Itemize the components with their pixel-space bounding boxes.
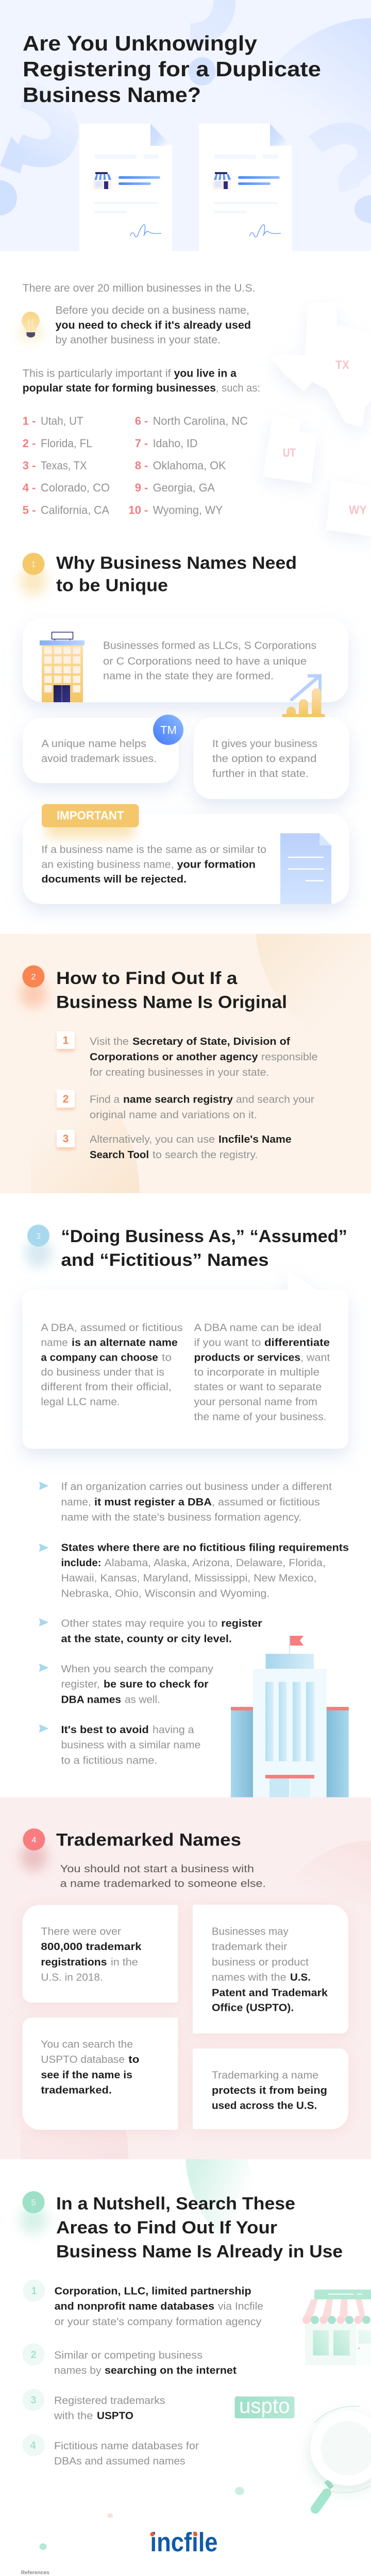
panel: intro (19, 282, 260, 516)
left column: a company can choose (41, 1352, 158, 1363)
list: top ten states: Colorado, CO (41, 481, 110, 494)
item 2 (23, 2343, 237, 2376)
card: trademark protection: protects it from being (212, 2084, 327, 2096)
panel: hero (0, 0, 371, 251)
card: trademark issues: A unique name helps (41, 738, 146, 750)
card: expand further: It gives your business (212, 738, 317, 750)
illustration: storefront (302, 2290, 371, 2365)
bullet: avoid similar names: business with a similar name (61, 1739, 200, 1751)
left column: is an alternate name (72, 1337, 178, 1348)
bullet: states with no requirements (40, 1541, 349, 1599)
list: top ten states: Idaho, ID (153, 437, 197, 450)
icon: office building (40, 632, 85, 702)
badge 5: 5 (31, 2199, 36, 2207)
bullet: other states (40, 1618, 262, 1645)
bullet: avoid similar names: It's best to avoid (61, 1724, 149, 1736)
Wyoming shape (326, 480, 371, 536)
bullet: must register: , assumed or fictitious (212, 1496, 320, 1508)
left column (41, 1322, 183, 1408)
text block: check the name: by another business in your state. (56, 334, 221, 346)
subheading: a name trademarked to someone else. (60, 1877, 266, 1889)
list: top ten states: Utah, UT (41, 414, 83, 428)
step 1: Visit the (90, 1036, 129, 1047)
illustration: government building (231, 1635, 349, 1797)
bullet: avoid similar names: to a fictitious name. (61, 1754, 157, 1766)
list: top ten states (23, 414, 248, 516)
card: 800,000 registrations: U.S. in 2018. (41, 1971, 103, 1983)
text block: check the name: you need to check if it's already used (56, 319, 251, 331)
Texas shape (269, 303, 371, 427)
subheading (60, 1863, 266, 1889)
panel: section 3 doing business as (23, 1225, 349, 1766)
right column: the name of your business. (194, 1412, 327, 1423)
item 2: 2 (30, 2349, 37, 2361)
bullet: other states: at the state, county or city level. (61, 1633, 232, 1645)
state labels: UT (283, 446, 296, 460)
bullet: avoid similar names: having a (153, 1724, 194, 1736)
step 2: 2 (63, 1093, 69, 1105)
step 1: 1 (63, 1035, 69, 1046)
subheading: You should not start a business with (60, 1863, 254, 1875)
card: 800,000 registrations: There were over (41, 1926, 121, 1938)
step 2: Find a (90, 1094, 120, 1106)
bullet: states with no requirements: include: (61, 1557, 101, 1569)
card: U.S. patent office: Office (USPTO). (212, 2002, 294, 2014)
bullet: avoid similar names (40, 1724, 200, 1766)
card: search USPTO database: USPTO database (41, 2054, 125, 2065)
step 3 (57, 1130, 292, 1161)
list: top ten states: 6 (135, 414, 141, 428)
bullet: must register: name, (61, 1496, 91, 1508)
bullet: states with no requirements: Hawaii, Kansas, Maryland, Mississippi, New Mexico, (61, 1572, 316, 1584)
warning text: If a business name is the same as or similar to (41, 844, 266, 856)
panel: section 1 why names need to be unique (20, 553, 349, 904)
step 1: responsible (261, 1051, 318, 1063)
text block: popular states: This is particularly important if (23, 368, 171, 379)
right column: if you want to (194, 1337, 261, 1348)
list: top ten states: - (144, 414, 148, 428)
card: trademark issues: avoid trademark issues. (41, 753, 157, 765)
card: search USPTO database: see if the name is (41, 2069, 132, 2081)
logo: incfile: incfile (150, 2528, 217, 2557)
bullet: states with no requirements: Alabama, Alaska, Arizona, Delaware, Florida, (104, 1557, 326, 1569)
item 4 (23, 2434, 199, 2467)
warning text: documents will be rejected. (41, 873, 187, 885)
heading: Trademarked Names (56, 1830, 241, 1850)
panel: section 2 how to find out (0, 934, 371, 1193)
badge 2: 2 (31, 973, 36, 981)
card: expand further: the option to expand (212, 753, 316, 765)
step 2: name search registry (123, 1094, 233, 1106)
heading: Why Business Names Need (56, 553, 297, 573)
heading (56, 969, 287, 1012)
speech card (23, 1270, 348, 1449)
card: search USPTO database: to (128, 2054, 139, 2065)
step 2: and search your (236, 1094, 314, 1106)
item 2: Similar or competing business (54, 2350, 203, 2361)
panel: state maps (263, 303, 371, 536)
item 3: with the (54, 2410, 93, 2421)
heading: to be Unique (56, 576, 168, 596)
list: top ten states: - (32, 504, 36, 516)
list: top ten states: - (32, 481, 36, 494)
card: formation types (23, 618, 348, 702)
item 1: and nonprofit name databases (55, 2301, 214, 2312)
list: top ten states: 9 (135, 481, 141, 494)
list: top ten states: 10 (128, 504, 141, 516)
right column: , want (300, 1352, 330, 1363)
list: top ten states: 8 (135, 459, 141, 472)
step 1: for creating businesses in your state. (90, 1066, 269, 1078)
step 3: Incfile's Name (218, 1133, 292, 1145)
warning text (41, 844, 266, 885)
title: Are You Unknowingly (23, 31, 257, 55)
list: top ten states: Texas, TX (41, 459, 87, 472)
badge 5 (19, 2191, 48, 2234)
heading: and “Fictitious” Names (61, 1250, 269, 1270)
state labels: TX (335, 358, 350, 371)
item 1: 1 (31, 2285, 37, 2297)
card: U.S. patent office: U.S. (290, 1971, 311, 1983)
item 3: Registered trademarks (54, 2395, 165, 2406)
state labels (283, 358, 367, 516)
heading (56, 2194, 343, 2261)
list: top ten states: Wyoming, WY (153, 504, 223, 516)
heading: How to Find Out If a (56, 969, 238, 988)
step 1: Secretary of State, Division of (132, 1036, 290, 1047)
right column: A DBA name can be ideal (194, 1322, 322, 1333)
heading: Areas to Find Out If Your (56, 2218, 277, 2238)
decorative question marks (0, 0, 371, 223)
text block: check the name (56, 304, 251, 346)
text block: check the name: Before you decide on a business name, (56, 304, 249, 316)
badge 1 (20, 553, 47, 596)
card: U.S. patent office: trademark their (212, 1941, 288, 1953)
decorative dots (40, 2487, 341, 2576)
icon: storefront copy (213, 172, 231, 189)
card: search USPTO database: You can search the (41, 2039, 133, 2050)
text block: popular states: you live in a (174, 368, 237, 379)
list: top ten states: - (32, 414, 36, 428)
left column: A DBA, assumed or fictitious (41, 1322, 183, 1333)
list: top ten states: - (144, 481, 148, 494)
list: top ten states: - (32, 459, 36, 472)
icon: magnifying glass (310, 2406, 371, 2509)
list: top ten states: - (32, 437, 36, 450)
step 2 (57, 1090, 314, 1121)
document illustration 1 (79, 124, 172, 251)
title (23, 31, 321, 107)
card: 800,000 registrations: 800,000 trademark (41, 1941, 142, 1953)
item 1: Corporation, LLC, limited partnership (55, 2285, 251, 2297)
card: trademark protection (193, 2048, 348, 2129)
item 1: via Incfile (218, 2301, 263, 2312)
right column: to incorporate in multiple (194, 1367, 319, 1378)
important label: IMPORTANT (57, 809, 124, 822)
badge 1: 1 (31, 561, 36, 569)
bullet: check DBA names: be sure to check for (104, 1679, 209, 1690)
icon: TM badge (153, 715, 183, 745)
list: top ten states: California, CA (41, 504, 109, 516)
bullet: states with no requirements: Nebraska, Ohio, Wisconsin and Wyoming. (61, 1588, 269, 1599)
step 3: 3 (63, 1133, 69, 1145)
icon: growth chart (282, 674, 325, 717)
item 4: Fictitious name databases for (54, 2441, 199, 2452)
bullet: check DBA names: DBA names (61, 1694, 121, 1705)
heading: “Doing Business As,” “Assumed” (61, 1227, 347, 1246)
references: References (21, 2570, 49, 2576)
text block: popular states: , such as: (216, 382, 260, 394)
intro line: There are over 20 million businesses in the U.S. (23, 282, 256, 294)
logo: uspto: uspto (239, 2394, 290, 2418)
list: top ten states: 7 (135, 437, 141, 450)
left column: name (41, 1337, 68, 1348)
badge 3: 3 (36, 1232, 41, 1241)
card: 800,000 registrations (23, 1905, 178, 2003)
icon: storefront (93, 172, 111, 189)
panel: section 4 trademarked names (0, 1797, 371, 2159)
list: top ten states: - (144, 504, 148, 516)
left column: to (162, 1352, 172, 1363)
card: trademark protection: Trademarking a name (212, 2070, 318, 2081)
left column: legal LLC name. (41, 1397, 120, 1408)
icon: light bulb (19, 312, 43, 342)
bullet: other states: register (221, 1618, 262, 1629)
badge 4: 4 (32, 1836, 37, 1844)
state labels: WY (349, 503, 367, 516)
badge 2 (20, 965, 47, 1008)
Utah shape (263, 414, 317, 483)
list: top ten states: 4 (23, 481, 29, 494)
list: top ten states: Florida, FL (41, 437, 92, 450)
badge 3 (25, 1225, 52, 1267)
item 1: or your state's company formation agency (55, 2316, 261, 2328)
item 3: 3 (30, 2395, 37, 2406)
heading: Business Name Is Already in Use (56, 2242, 343, 2261)
step 1: Corporations or another agency (90, 1051, 258, 1063)
card text: or C Corporations need to have a unique (103, 655, 307, 667)
list: top ten states: 2 (23, 437, 29, 450)
card text: name in the state they are formed. (103, 670, 274, 682)
bullet: must register (40, 1481, 332, 1523)
step 3: Search Tool (90, 1149, 149, 1161)
bullet: states with no requirements: States where there are no fictitious filing requirements (61, 1541, 349, 1553)
right column: differentiate (264, 1337, 330, 1348)
card: search USPTO database (23, 2018, 178, 2130)
card: U.S. patent office: Patent and Trademark (212, 1987, 328, 1998)
card: trademark issues (23, 718, 179, 783)
text block: popular states: popular state for forming businesses (23, 382, 216, 394)
document illustration 2 (199, 124, 292, 251)
list: top ten states: Georgia, GA (153, 481, 215, 494)
card: U.S. patent office: names with the (212, 1971, 286, 1983)
text block: popular states (23, 368, 260, 394)
card: search USPTO database: trademarked. (41, 2084, 112, 2096)
heading: Business Name Is Original (56, 993, 287, 1012)
card text (103, 640, 316, 682)
item 4: 4 (30, 2440, 36, 2451)
item 1 (23, 2279, 263, 2328)
left column: different from their official, (41, 1382, 172, 1393)
bullet: must register: name with the state's business formation agency. (61, 1512, 301, 1523)
card: 800,000 registrations: registrations (41, 1956, 107, 1968)
right column: products or services (194, 1352, 300, 1363)
heading (56, 553, 297, 596)
left column: do business under that is (41, 1367, 164, 1378)
icon: TM badge: TM (160, 724, 177, 737)
card: U.S. patent office: Businesses may (212, 1926, 289, 1938)
list: top ten states: Oklahoma, OK (153, 459, 226, 472)
bullet: must register: it must register a DBA (94, 1496, 212, 1508)
list: top ten states: 1 (23, 414, 29, 428)
card text: Businesses formed as LLCs, S Corporations (103, 640, 316, 652)
card: 800,000 registrations: in the (111, 1956, 138, 1968)
item 3: USPTO (97, 2410, 133, 2421)
bullet: other states: Other states may require you to (61, 1618, 217, 1629)
item 2: searching on the internet (105, 2365, 237, 2376)
right column (194, 1322, 330, 1423)
card: trademark protection: used across the U.S. (212, 2100, 317, 2112)
heading: In a Nutshell, Search These (56, 2194, 295, 2213)
right column: states or want to separate (194, 1382, 322, 1393)
bullet: check DBA names: as well. (125, 1694, 160, 1705)
card: expand further (194, 717, 349, 799)
badge 4 (21, 1828, 47, 1871)
step 1 (57, 1031, 318, 1078)
heading (61, 1227, 347, 1270)
title: Business Name? (23, 83, 201, 107)
list: top ten states: 3 (23, 459, 29, 472)
list: top ten states: - (144, 459, 148, 472)
list: top ten states: North Carolina, NC (153, 414, 248, 428)
warning text: your formation (177, 859, 256, 871)
step 3: to search the registry. (153, 1149, 258, 1161)
card: U.S. patent office (193, 1905, 348, 2033)
item 4: DBAs and assumed names (54, 2456, 185, 2467)
bullet: check DBA names (40, 1663, 214, 1705)
item 2: names by (54, 2365, 101, 2376)
right column: your personal name from (194, 1397, 317, 1408)
list: top ten states: - (144, 437, 148, 450)
step 3: Alternatively, you can use (90, 1133, 215, 1145)
card: expand further: further in that state. (212, 768, 309, 779)
card: important (23, 804, 349, 904)
title: Registering for a Duplicate (23, 57, 321, 81)
step 2: original name and variations on it. (90, 1109, 257, 1121)
list: top ten states: 5 (23, 504, 29, 516)
item 3 (23, 2388, 165, 2421)
bullet: must register: If an organization carries out business under a different (61, 1481, 332, 1493)
bullet: check DBA names: register, (61, 1679, 100, 1690)
bullet: check DBA names: When you search the company (61, 1663, 214, 1675)
warning text: an existing business name, (41, 859, 174, 871)
important label (42, 804, 139, 838)
card: U.S. patent office: business or product (212, 1956, 309, 1968)
panel: section 5 in a nutshell (19, 2159, 371, 2576)
icon: rejected document (280, 833, 331, 904)
